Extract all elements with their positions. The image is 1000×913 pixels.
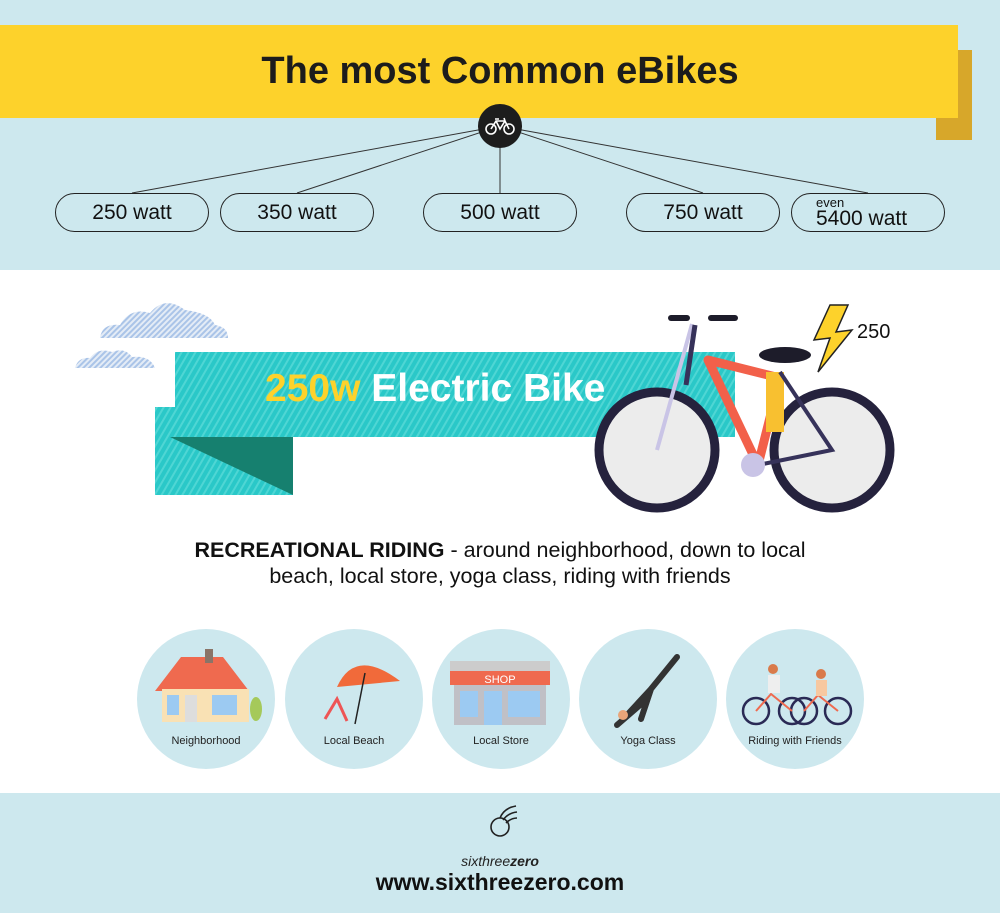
text: 5400 watt xyxy=(816,207,907,230)
text: 350 watt xyxy=(257,201,337,224)
icon: bike circle xyxy=(478,104,522,148)
description text xyxy=(194,538,806,588)
top section background xyxy=(0,0,1000,270)
circle: local beach: Local Beach xyxy=(324,735,384,747)
circle: neighborhood: Neighborhood xyxy=(171,735,241,747)
circle: riding with friends: Riding with Friends xyxy=(748,735,842,747)
circle: local store xyxy=(432,629,570,769)
circle: local beach xyxy=(285,629,423,769)
text: 750 watt xyxy=(663,201,743,224)
circle: local store: SHOP xyxy=(484,674,516,686)
circle: riding with friends xyxy=(726,629,864,769)
logo icon xyxy=(490,805,518,837)
website: www.sixthreezero.com xyxy=(376,869,624,895)
brand name: sixthreezero xyxy=(461,853,539,869)
clouds xyxy=(75,303,228,368)
ribbon banner xyxy=(155,352,735,495)
text: even xyxy=(816,195,844,210)
circle: yoga class xyxy=(579,629,717,769)
pills: 250 watt xyxy=(92,201,172,224)
description text: RECREATIONAL RIDING - around neighborhood, down to local xyxy=(194,538,806,562)
circle: neighborhood xyxy=(137,629,275,769)
icon: electric bike xyxy=(594,304,894,512)
footer xyxy=(0,793,1000,913)
pills xyxy=(55,193,209,232)
title banner xyxy=(0,25,958,118)
circle: local store: Local Store xyxy=(473,735,529,747)
text: 500 watt xyxy=(460,201,540,224)
ribbon title: 250w Electric Bike xyxy=(265,367,605,410)
connector lines xyxy=(132,129,868,193)
description text: beach, local store, yoga class, riding with friends xyxy=(269,564,731,588)
title banner: The most Common eBikes xyxy=(261,50,739,92)
circle: yoga class: Yoga Class xyxy=(620,735,676,747)
icon: electric bike: 250 xyxy=(857,321,890,343)
title banner fold xyxy=(936,50,972,140)
